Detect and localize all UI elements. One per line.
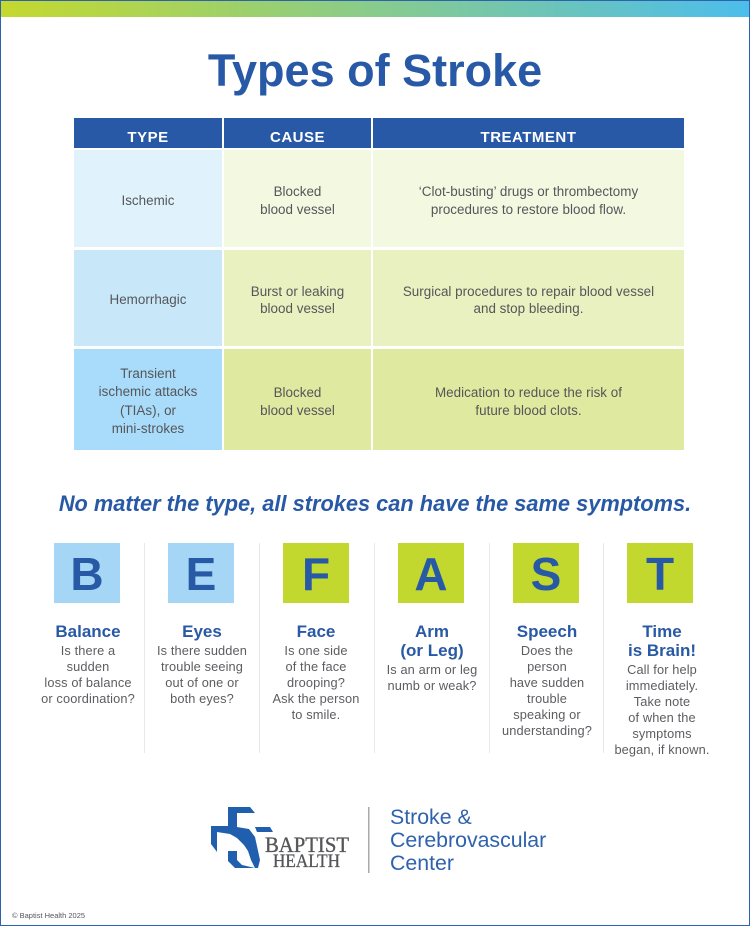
column: speech: trouble (527, 691, 567, 706)
column: time: Take note (634, 694, 690, 709)
column: face (272, 622, 360, 722)
center name: Cerebrovascular (390, 828, 546, 852)
center name (390, 805, 546, 875)
tile E (168, 543, 234, 603)
row 2 cause: blood vessel (260, 301, 335, 316)
tile S: S (531, 548, 561, 600)
column: arm: Is an arm or leg (387, 662, 477, 677)
row 1 treatment: procedures to restore blood flow. (431, 202, 626, 216)
column: arm (387, 622, 477, 693)
row 3 treatment (373, 349, 684, 450)
row 3 type: (TIAs), or (120, 402, 176, 418)
column: time: began, if known. (614, 742, 710, 757)
row 1 cause (224, 150, 371, 247)
row 1 treatment: ‘Clot-busting’ drugs or thrombectomy (419, 184, 638, 199)
column: time: Time (642, 622, 682, 641)
column: speech: have sudden (510, 675, 584, 690)
center name: Stroke & (390, 805, 472, 829)
row 3 type: mini-strokes (112, 421, 184, 436)
column: balance (41, 622, 135, 706)
column: speech: Speech (517, 622, 577, 641)
row 2 type: Hemorrhagic (110, 292, 186, 307)
column: eyes: out of one or (165, 675, 239, 690)
logo: Baptist Health (211, 807, 370, 873)
row 1 cause: Blocked (274, 184, 321, 199)
column: face: Face (297, 622, 335, 641)
row 1 type: Ischemic (121, 193, 175, 208)
column: arm: numb or weak? (387, 678, 477, 693)
column: balance: loss of balance (44, 675, 132, 690)
row 3 treatment: future blood clots. (475, 402, 582, 418)
header: cause (224, 118, 371, 148)
row 3 type: ischemic attacks (99, 384, 197, 399)
header: cause: CAUSE (270, 129, 325, 146)
row 2 treatment: Surgical procedures to repair blood vessel (403, 284, 654, 299)
column: time: of when the (628, 710, 696, 725)
column: balance: or coordination? (41, 691, 135, 706)
column: eyes (157, 622, 247, 706)
row 3 type (74, 349, 222, 450)
column: face: of the face (285, 659, 347, 674)
table: stroke types (74, 118, 684, 450)
tile B: B (70, 548, 104, 600)
column: speech: Does the (521, 643, 573, 658)
header: type: TYPE (127, 129, 169, 146)
header: treatment (373, 118, 684, 148)
row 1 treatment (373, 150, 684, 247)
row 1 cause: blood vessel (260, 202, 335, 216)
row 3 type: Transient (120, 366, 176, 381)
tile T: T (646, 548, 674, 600)
tile S (513, 543, 579, 603)
column: face: Is one side (284, 643, 348, 658)
column: face: to smile. (292, 707, 340, 722)
row 2 cause (224, 250, 371, 346)
tile A (398, 543, 464, 603)
column: balance: Balance (55, 622, 121, 641)
logo divider (368, 807, 370, 873)
column: speech: speaking or (513, 707, 581, 722)
logo wordmark (265, 832, 350, 872)
column: time: is Brain! (628, 641, 696, 660)
column: time: symptoms (632, 726, 692, 741)
logo wordmark: HEALTH (273, 852, 340, 872)
header: treatment: TREATMENT (481, 129, 576, 146)
row 2 type (74, 250, 222, 346)
logo mark (211, 807, 273, 868)
column: speech (502, 622, 592, 738)
column: balance: sudden (67, 659, 109, 674)
row 3 cause: Blocked (274, 385, 321, 400)
title: Types of Stroke (208, 45, 542, 96)
column: time: Call for help (627, 662, 697, 677)
column: speech: person (527, 659, 567, 674)
tile E: E (186, 548, 216, 600)
column: time (614, 622, 710, 757)
logo wordmark: BAPTIST (265, 832, 350, 857)
tile A: A (414, 548, 448, 600)
column: speech: understanding? (502, 723, 592, 738)
tile F (283, 543, 349, 603)
row 1 type (74, 150, 222, 247)
column: face: Ask the person (272, 691, 360, 706)
copyright: © Baptist Health 2025 (12, 911, 85, 920)
header: type (74, 118, 222, 148)
column: eyes: trouble seeing (161, 659, 243, 674)
column: face: drooping? (287, 675, 345, 690)
center name: Center (390, 851, 454, 875)
row 2 treatment: and stop bleeding. (473, 301, 583, 316)
column: balance: Is there a (61, 643, 115, 658)
column: eyes: Is there sudden (157, 643, 247, 658)
row 2 cause: Burst or leaking (251, 284, 344, 299)
row 3 treatment: Medication to reduce the risk of (435, 385, 622, 400)
subheading: No matter the type, all strokes can have the same symptoms. (59, 491, 691, 516)
row 3 cause (224, 349, 371, 450)
gradient top bar (0, 0, 750, 17)
column: time: immediately. (626, 678, 698, 693)
column: eyes: Eyes (182, 622, 222, 641)
row 2 treatment (373, 250, 684, 346)
column: arm: Arm (415, 622, 449, 641)
row 3 cause: blood vessel (260, 402, 335, 418)
column: eyes: both eyes? (170, 691, 234, 706)
column: arm: (or Leg) (400, 641, 464, 660)
tile B (54, 543, 120, 603)
tile T (627, 543, 693, 603)
tile F: F (302, 548, 330, 600)
